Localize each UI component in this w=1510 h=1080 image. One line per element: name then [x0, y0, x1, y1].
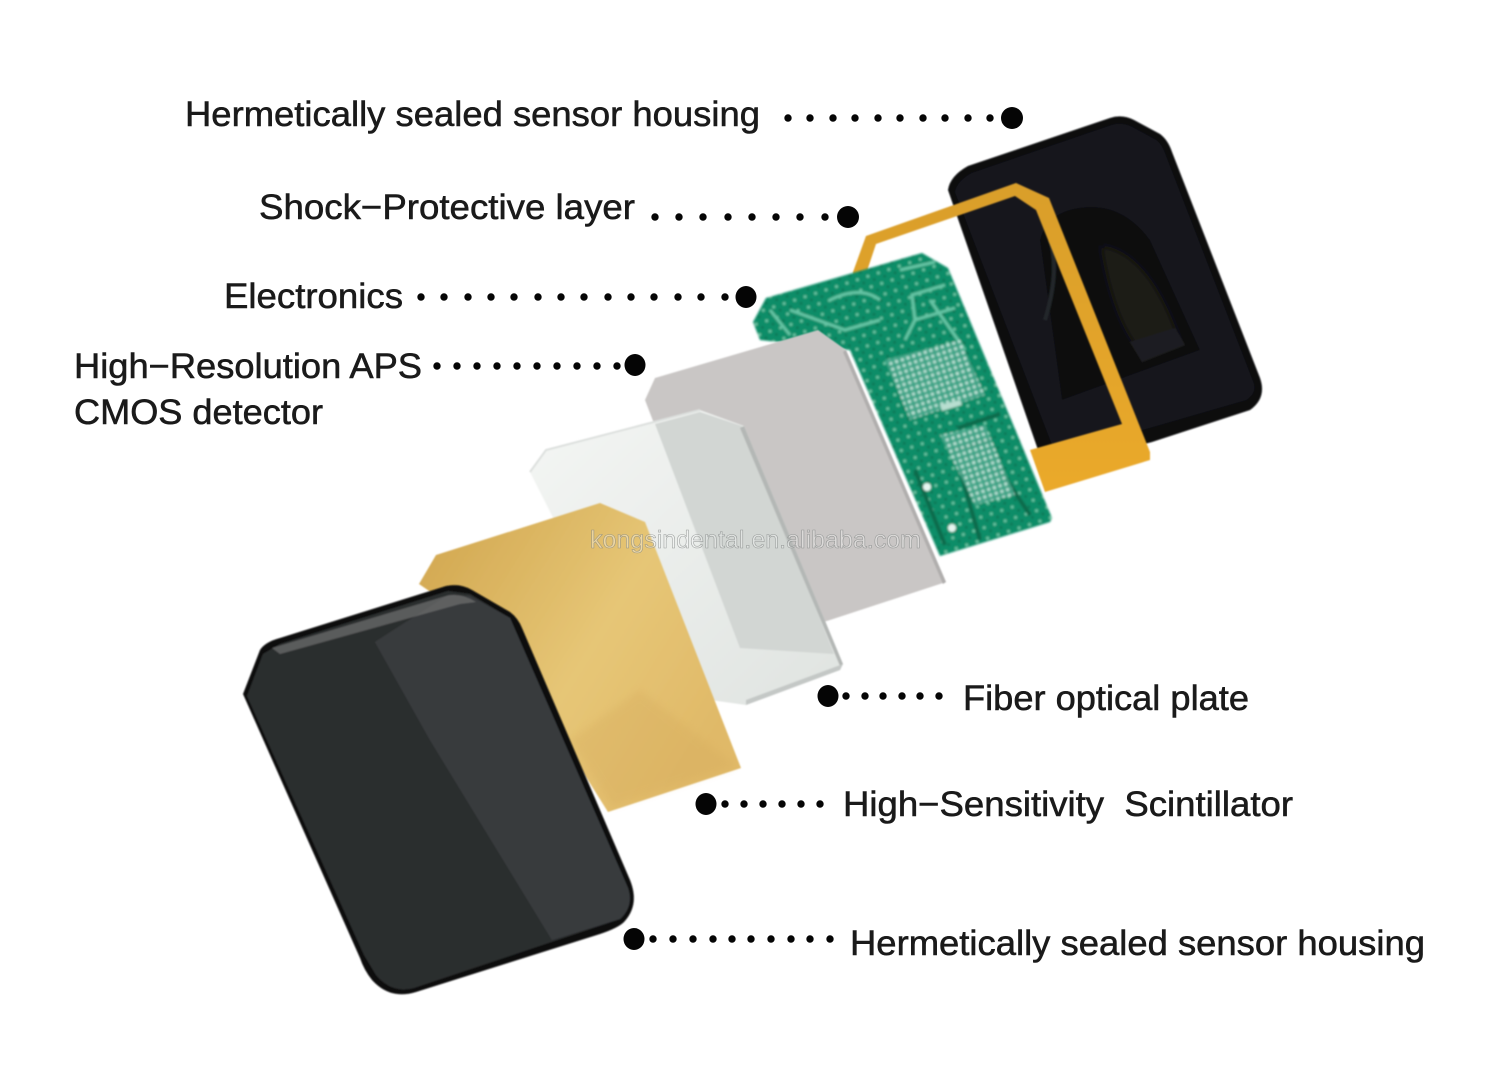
- back sensor housing: [948, 116, 1262, 470]
- watermark: kongsindental.en.alibaba.com: [590, 526, 921, 554]
- label: back housing: Hermetically sealed sensor housing: [185, 95, 760, 134]
- label: front housing: [624, 924, 1425, 963]
- label: scintillator: High−Sensitivity Scintillator: [843, 785, 1293, 824]
- high-sensitivity gold scintillator: [419, 503, 741, 812]
- label: fiber optical plate: Fiber optical plate: [963, 679, 1249, 718]
- label: CMOS detector: CMOS detector: [74, 393, 323, 432]
- chip areas: [885, 340, 985, 420]
- front sensor housing: [243, 585, 634, 994]
- label: back housing: [185, 95, 1023, 134]
- high-resolution APS CMOS detector plate: [645, 330, 946, 648]
- label: electronics: [224, 277, 756, 316]
- label: shock-protective layer: Shock−Protective layer: [259, 188, 635, 227]
- electronics circuit board: [753, 253, 1052, 556]
- label: electronics: Electronics: [224, 277, 403, 316]
- label: CMOS detector: [74, 347, 646, 432]
- label: CMOS detector: High−Resolution APS: [74, 347, 422, 386]
- fiber optical plate: [530, 410, 843, 705]
- label: front housing: Hermetically sealed sensor housing: [850, 924, 1425, 963]
- label: shock-protective layer: [259, 188, 859, 228]
- fingerprint-like recess: [1040, 207, 1200, 400]
- label: fiber optical plate: [818, 679, 1249, 718]
- circuit traces: [770, 262, 965, 350]
- shock-protective yellow frame: [853, 183, 1150, 492]
